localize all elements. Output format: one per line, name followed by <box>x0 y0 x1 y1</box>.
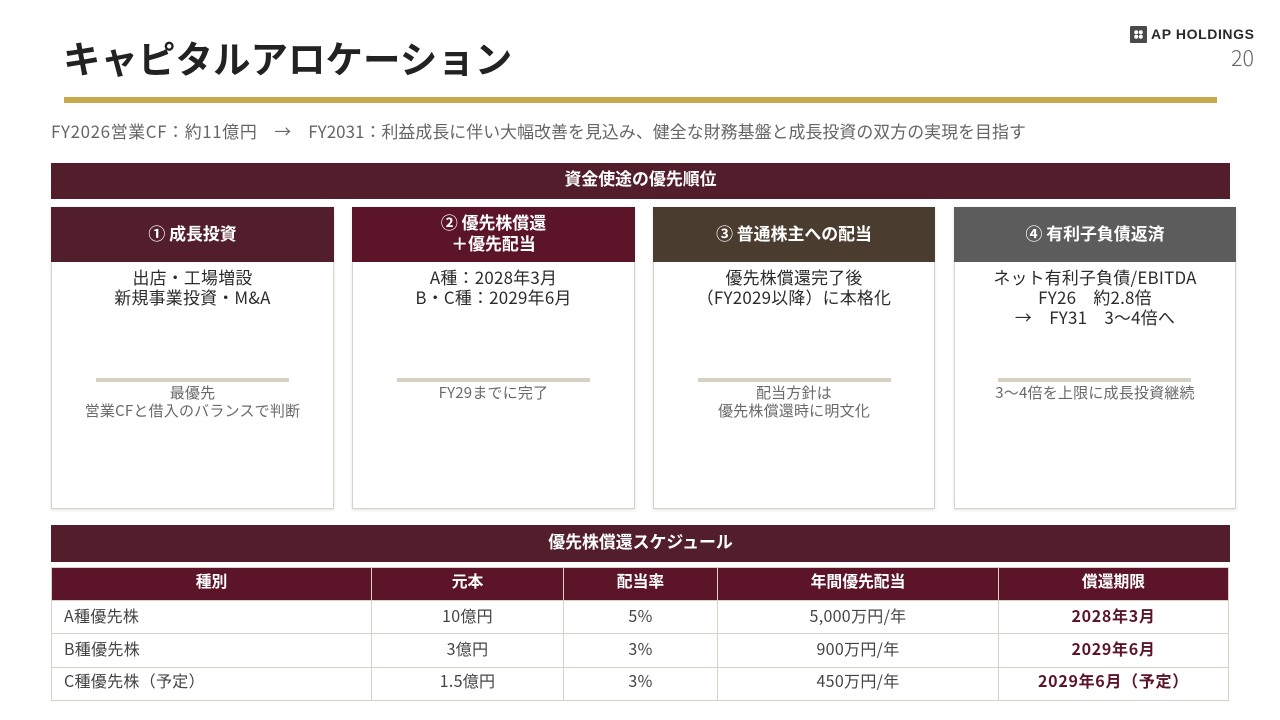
section heading: funding priorities: 資金使途の優先順位 <box>564 165 716 190</box>
card body 2: B・C種：2029年6月 <box>415 284 572 309</box>
title: キャピタルアロケーション <box>63 29 512 84</box>
logo: AP Holdings <box>1130 26 1255 43</box>
panel: debt repayment <box>954 207 1236 509</box>
table header row: 元本 <box>452 569 483 592</box>
card body 3 <box>697 264 891 309</box>
table header row: 配当率 <box>617 569 664 592</box>
panel: growth investment <box>51 207 334 509</box>
section heading: funding priorities <box>51 163 1230 199</box>
card header 4 <box>954 207 1236 262</box>
card body 1: 新規事業投資・M&A <box>114 284 271 309</box>
card body 3: （FY2029以降）に本格化 <box>697 284 891 309</box>
table header row <box>52 568 1229 601</box>
table row: A: 5,000万円/年 <box>810 603 906 627</box>
table row: C: 450万円/年 <box>816 668 900 692</box>
card body 3: 優先株償還完了後 <box>725 264 863 289</box>
table header row: 種別 <box>196 569 227 592</box>
card header 2: ② 優先株償還 <box>441 209 546 234</box>
table row: A: 10億円 <box>442 603 493 627</box>
card note 3: 配当方針は <box>756 382 832 403</box>
card body 2 <box>415 264 572 309</box>
table row: C <box>52 668 1229 701</box>
panel: preferred redemption <box>352 207 635 509</box>
logo text: AP HOLDINGS <box>1151 26 1255 42</box>
card header 2: ＋優先配当 <box>451 230 536 255</box>
card header 3: ③ 普通株主への配当 <box>716 220 872 244</box>
section heading: redemption schedule <box>51 525 1230 562</box>
card note 1 <box>85 382 300 421</box>
table row: A: A種優先株 <box>64 603 139 627</box>
card body 4 <box>993 264 1197 329</box>
card header 1: ① 成長投資 <box>148 220 237 244</box>
table header row: 年間優先配当 <box>811 569 905 592</box>
card note 1: 営業CFと借入のバランスで判断 <box>85 400 300 421</box>
section heading: redemption schedule: 優先株償還スケジュール <box>548 528 733 553</box>
table row: A: 5% <box>628 603 653 627</box>
table row: B: 900万円/年 <box>816 636 900 660</box>
card body 1: 出店・工場増設 <box>132 264 252 289</box>
card header 1 <box>51 207 334 262</box>
card header 2 <box>352 207 635 262</box>
card note 2: FY29までに完了 <box>439 382 548 403</box>
table row: C: 2029年6月（予定） <box>1038 668 1189 692</box>
table row: B <box>52 634 1229 668</box>
table row: A: 2028年3月 <box>1071 603 1156 627</box>
table row: B: 2029年6月 <box>1071 636 1156 660</box>
table row: A <box>52 601 1229 634</box>
table row: C: C種優先株（予定） <box>64 668 205 692</box>
page number: 20 <box>1231 42 1254 73</box>
card header 3 <box>653 207 935 262</box>
card note 3: 優先株償還時に明文化 <box>718 400 870 421</box>
card body 4: ネット有利子負債/EBITDA <box>993 264 1197 289</box>
table: preferred stock redemption schedule <box>51 567 1229 701</box>
card header 4: ④ 有利子負債返済 <box>1026 220 1164 244</box>
card body 2: A種：2028年3月 <box>430 264 557 289</box>
card body 1 <box>114 264 271 309</box>
card note 4: 3～4倍を上限に成長投資継続 <box>995 382 1195 403</box>
card body 4: → FY31 3～4倍へ <box>1015 304 1175 329</box>
card note 3 <box>718 382 870 421</box>
card note 1: 最優先 <box>170 382 215 403</box>
table header row: 償還期限 <box>1082 569 1145 592</box>
panel: common dividends <box>653 207 935 509</box>
table row: B: 3億円 <box>447 636 488 660</box>
table row: C: 1.5億円 <box>440 668 495 692</box>
card body 4: FY26 約2.8倍 <box>1038 284 1152 309</box>
icon: logo mark <box>1130 26 1147 43</box>
table row: B: B種優先株 <box>64 636 140 660</box>
table row: B: 3% <box>628 636 653 660</box>
table row: C: 3% <box>628 668 653 692</box>
subtitle text: FY2026営業CF：約11億円 → FY2031：利益成長に伴い大幅改善を見込み、健全な財務基盤と成長投資の双方の実現を目指す <box>51 118 1026 143</box>
gold title rule <box>64 97 1217 103</box>
